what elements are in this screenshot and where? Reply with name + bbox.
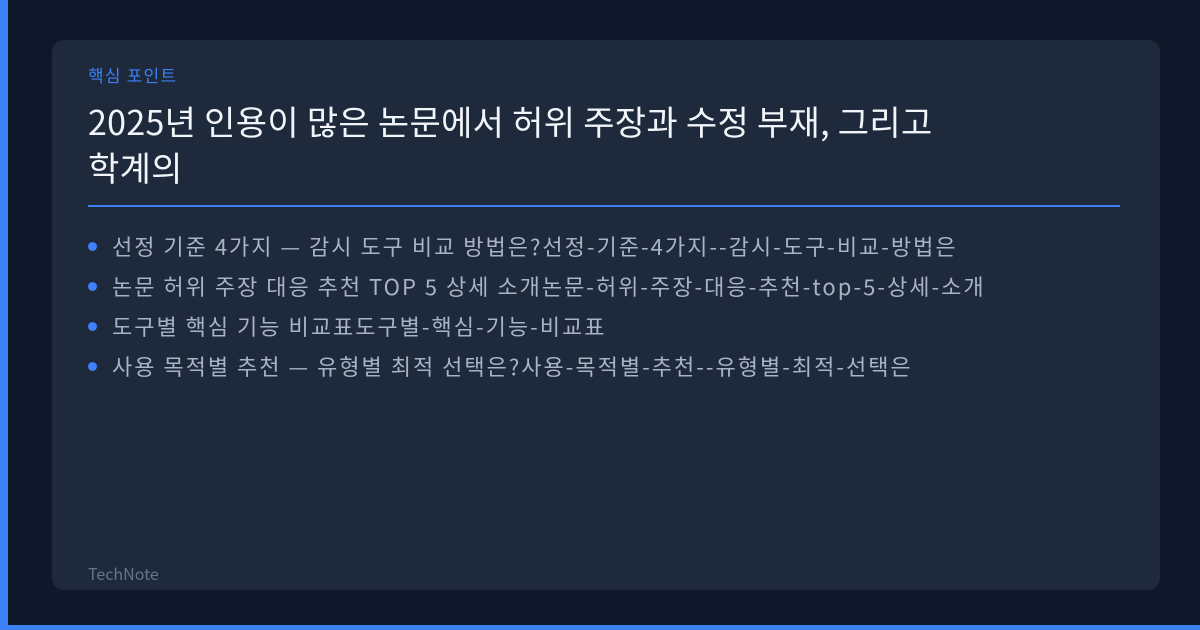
title: 2025년 인용이 많은 논문에서 허위 주장과 수정 부재, 그리고 학계의 [88, 96, 933, 191]
label: key points: 핵심 포인트 [88, 62, 177, 87]
bullet list [88, 230, 986, 382]
bullet 4: 사용 목적별 추천 — 유형별 최적 선택은?사용-목적별-추천--유형별-최적-선택은 [112, 350, 913, 382]
footer: brand: TechNote [88, 561, 159, 585]
bullet 2: 논문 허위 주장 대응 추천 TOP 5 상세 소개논문-허위-주장-대응-추천-top-5-상세-소개 [112, 270, 986, 302]
bullet 3: 도구별 핵심 기능 비교표도구별-핵심-기능-비교표 [112, 310, 606, 342]
bullet 1: 선정 기준 4가지 — 감시 도구 비교 방법은?선정-기준-4가지--감시-도구-비교-방법은 [112, 230, 958, 262]
